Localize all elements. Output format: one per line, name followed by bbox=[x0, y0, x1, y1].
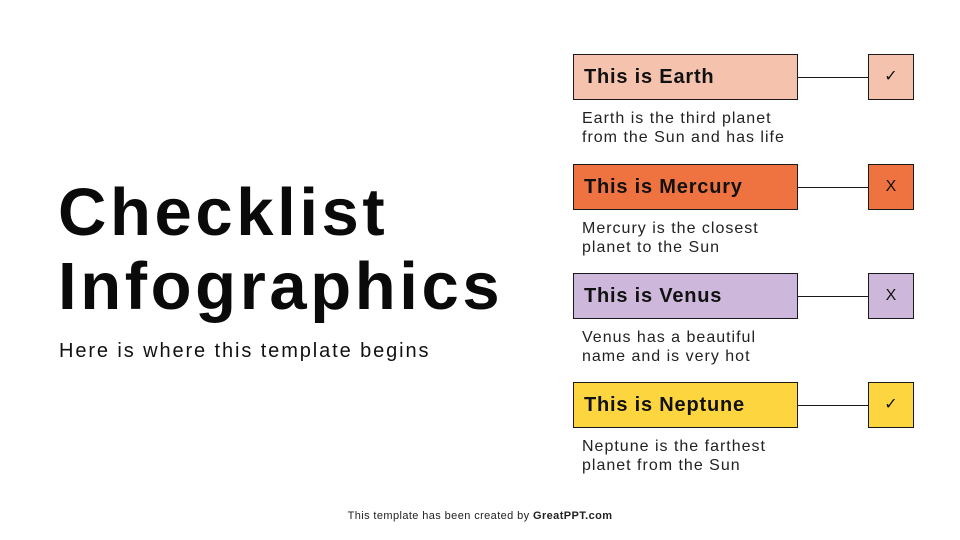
footer: This template has been created by GreatPPT.com bbox=[348, 510, 612, 522]
check box: Mercury bbox=[868, 164, 914, 210]
label box: Mercury bbox=[573, 164, 798, 210]
label box: Venus bbox=[573, 273, 798, 319]
title bbox=[58, 175, 503, 324]
check box: Earth bbox=[868, 54, 914, 100]
description: Earth: from the Sun and has life bbox=[582, 129, 785, 146]
label box: Venus: This is Venus bbox=[584, 285, 722, 307]
connector bbox=[798, 187, 868, 188]
connector bbox=[798, 405, 868, 406]
title: Checklist bbox=[58, 175, 388, 250]
description: Mercury bbox=[582, 220, 759, 256]
connector bbox=[798, 77, 868, 78]
check box: Neptune bbox=[868, 382, 914, 428]
description: Earth bbox=[582, 110, 785, 146]
title: Infographics bbox=[58, 249, 503, 324]
label box: Neptune bbox=[573, 382, 798, 428]
description: Neptune: planet from the Sun bbox=[582, 457, 741, 474]
row: Neptune bbox=[573, 382, 914, 474]
row: Earth bbox=[573, 54, 914, 146]
label box: Earth bbox=[573, 54, 798, 100]
description: Neptune bbox=[582, 438, 766, 474]
label box: Earth: This is Earth bbox=[584, 66, 714, 88]
description: Neptune: Neptune is the farthest bbox=[582, 438, 766, 455]
check box: Mercury: X bbox=[886, 178, 896, 195]
check box: Venus: X bbox=[886, 287, 896, 304]
connector bbox=[798, 296, 868, 297]
description: Venus: name and is very hot bbox=[582, 348, 751, 365]
check box: Neptune: ✓ bbox=[884, 396, 898, 413]
row: Mercury bbox=[573, 164, 914, 256]
subtitle: Here is where this template begins bbox=[59, 340, 430, 362]
check box: Venus bbox=[868, 273, 914, 319]
check box: Earth: ✓ bbox=[884, 68, 898, 85]
description: Earth: Earth is the third planet bbox=[582, 110, 772, 127]
label box: Neptune: This is Neptune bbox=[584, 394, 745, 416]
description: Venus: Venus has a beautiful bbox=[582, 329, 756, 346]
description: Venus bbox=[582, 329, 756, 365]
description: Mercury: planet to the Sun bbox=[582, 239, 720, 256]
description: Mercury: Mercury is the closest bbox=[582, 220, 759, 237]
label box: Mercury: This is Mercury bbox=[584, 176, 743, 198]
row: Venus bbox=[573, 273, 914, 365]
